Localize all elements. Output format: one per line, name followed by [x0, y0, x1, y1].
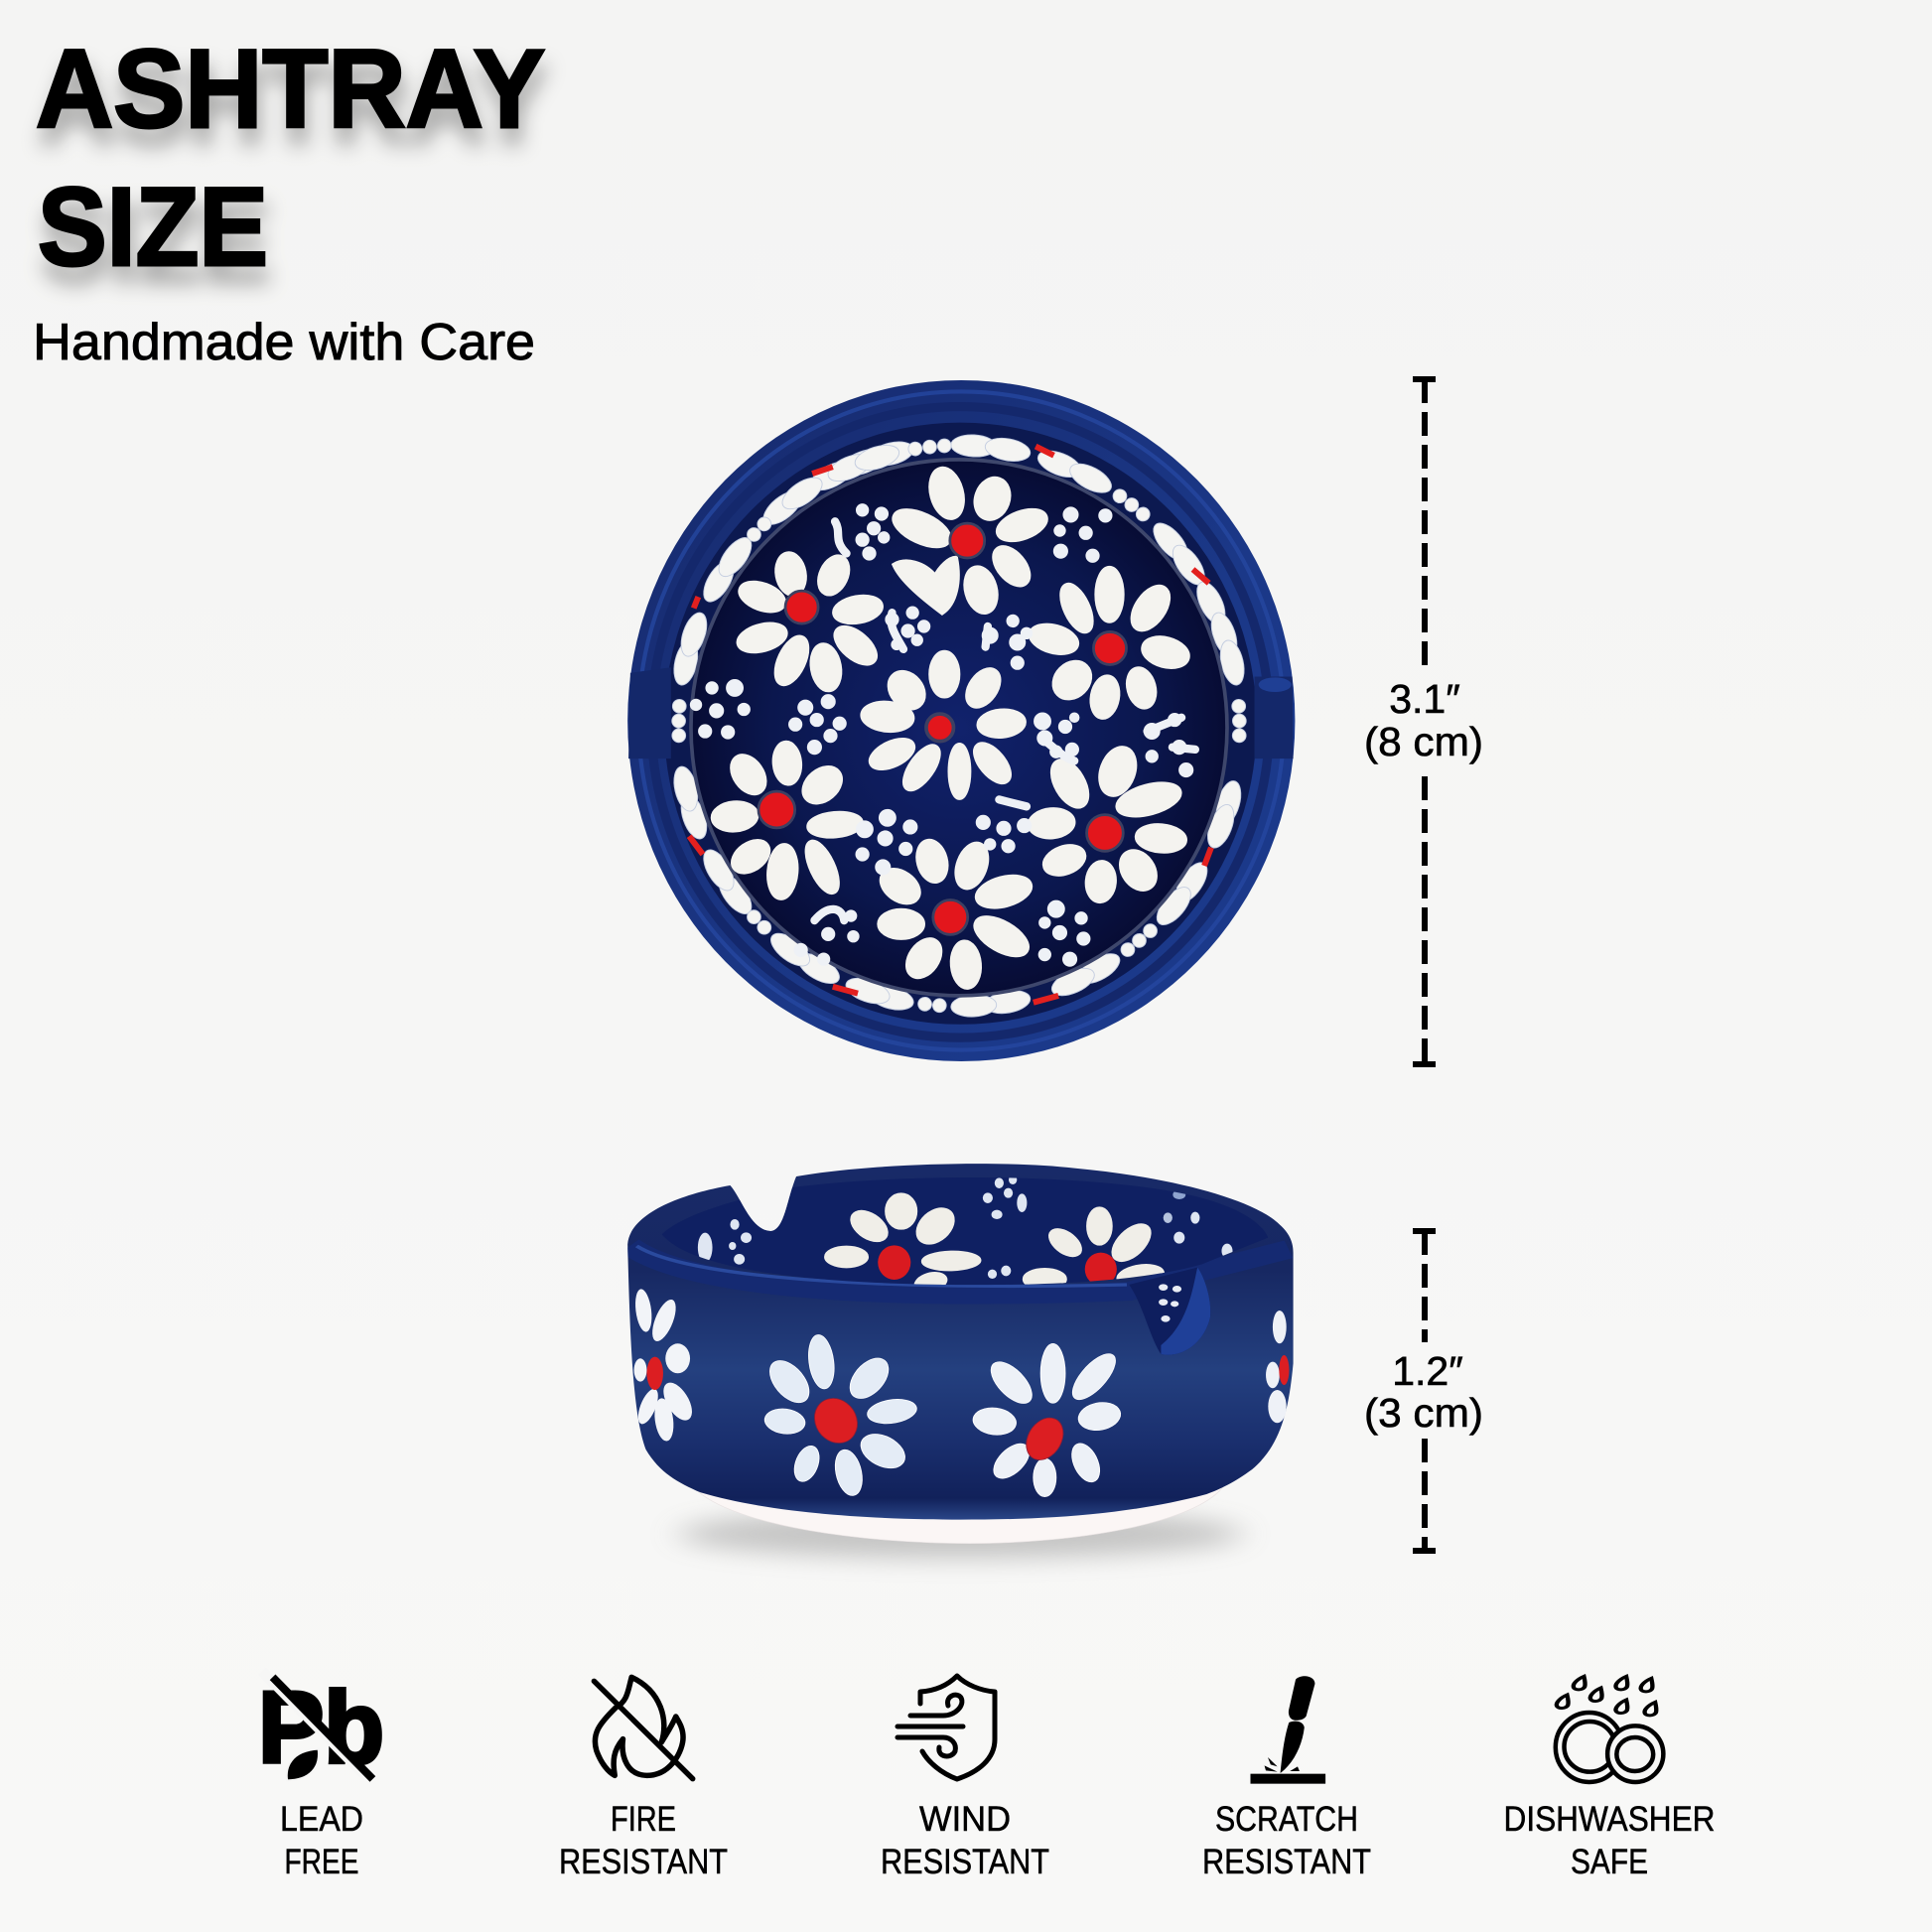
label	[559, 1800, 728, 1881]
dimension: height: (3 cm)	[1364, 1390, 1483, 1436]
dimension: diameter: 3.1″	[1389, 676, 1460, 722]
icon: lead free: Pb	[258, 1671, 384, 1784]
label: RESISTANT	[1202, 1843, 1371, 1881]
label: LEAD	[280, 1800, 363, 1839]
unglazed foot	[694, 1487, 1222, 1544]
decorated band	[670, 434, 1248, 1018]
dimension: height	[1364, 1231, 1483, 1551]
title	[36, 27, 545, 289]
flower: centre	[862, 652, 1026, 798]
label	[881, 1800, 1049, 1881]
label: DISHWASHER	[1503, 1800, 1716, 1839]
icon: crossed flame	[594, 1677, 693, 1779]
dimension: diameter: (8 cm)	[1364, 719, 1483, 764]
icon: plates and drops	[1556, 1676, 1663, 1782]
subtitle: Handmade with Care	[33, 314, 535, 371]
inner flower left	[826, 1194, 980, 1296]
glossy rim highlight	[629, 1246, 1289, 1295]
icon: scalpel on surface	[1250, 1676, 1325, 1784]
feature: lead free	[258, 1671, 384, 1881]
feature: wind resistant	[881, 1676, 1049, 1881]
label	[1503, 1800, 1716, 1881]
flower: lower left	[712, 742, 863, 899]
rim	[627, 380, 1295, 1061]
flower: upper left	[736, 551, 884, 692]
label	[280, 1800, 363, 1881]
dimension: height: 1.2″	[1392, 1348, 1463, 1394]
glazed body	[627, 1164, 1294, 1520]
flower: lower right	[1029, 744, 1186, 902]
front notch	[1129, 1268, 1210, 1355]
cigarette notches	[628, 667, 1294, 759]
title: SIZE	[38, 165, 268, 289]
interior	[662, 1177, 1268, 1285]
outer flower right edge	[1266, 1311, 1289, 1423]
flower: upper right	[1028, 568, 1191, 720]
flower: bottom	[876, 838, 1034, 989]
label: SCRATCH	[1215, 1800, 1358, 1839]
inner flower right	[1025, 1208, 1166, 1290]
label: RESISTANT	[559, 1843, 728, 1881]
outer flower right	[968, 1343, 1128, 1497]
cast shadow	[678, 1509, 1243, 1559]
icon: shield with wind	[897, 1676, 995, 1779]
dot clusters	[691, 504, 1195, 966]
label	[1202, 1800, 1371, 1881]
top view of ashtray	[627, 380, 1295, 1061]
feature: scratch resistant	[1202, 1676, 1371, 1881]
outer flower left edge	[633, 1289, 692, 1442]
title: ASHTRAY	[36, 27, 545, 151]
feature: dishwasher safe	[1503, 1676, 1716, 1881]
rim gloss line	[636, 1246, 1127, 1286]
dimension: diameter	[1364, 379, 1483, 1064]
feature: fire resistant	[559, 1677, 728, 1881]
inner dots	[698, 1175, 1233, 1279]
side view of ashtray	[627, 1164, 1294, 1559]
label: FREE	[284, 1843, 359, 1881]
label: SAFE	[1571, 1843, 1648, 1881]
label: WIND	[919, 1800, 1011, 1839]
flower: top	[889, 466, 1049, 616]
label: RESISTANT	[881, 1843, 1049, 1881]
outer flower centre	[759, 1334, 920, 1497]
ashtray floor	[691, 460, 1227, 996]
label: FIRE	[611, 1800, 676, 1839]
